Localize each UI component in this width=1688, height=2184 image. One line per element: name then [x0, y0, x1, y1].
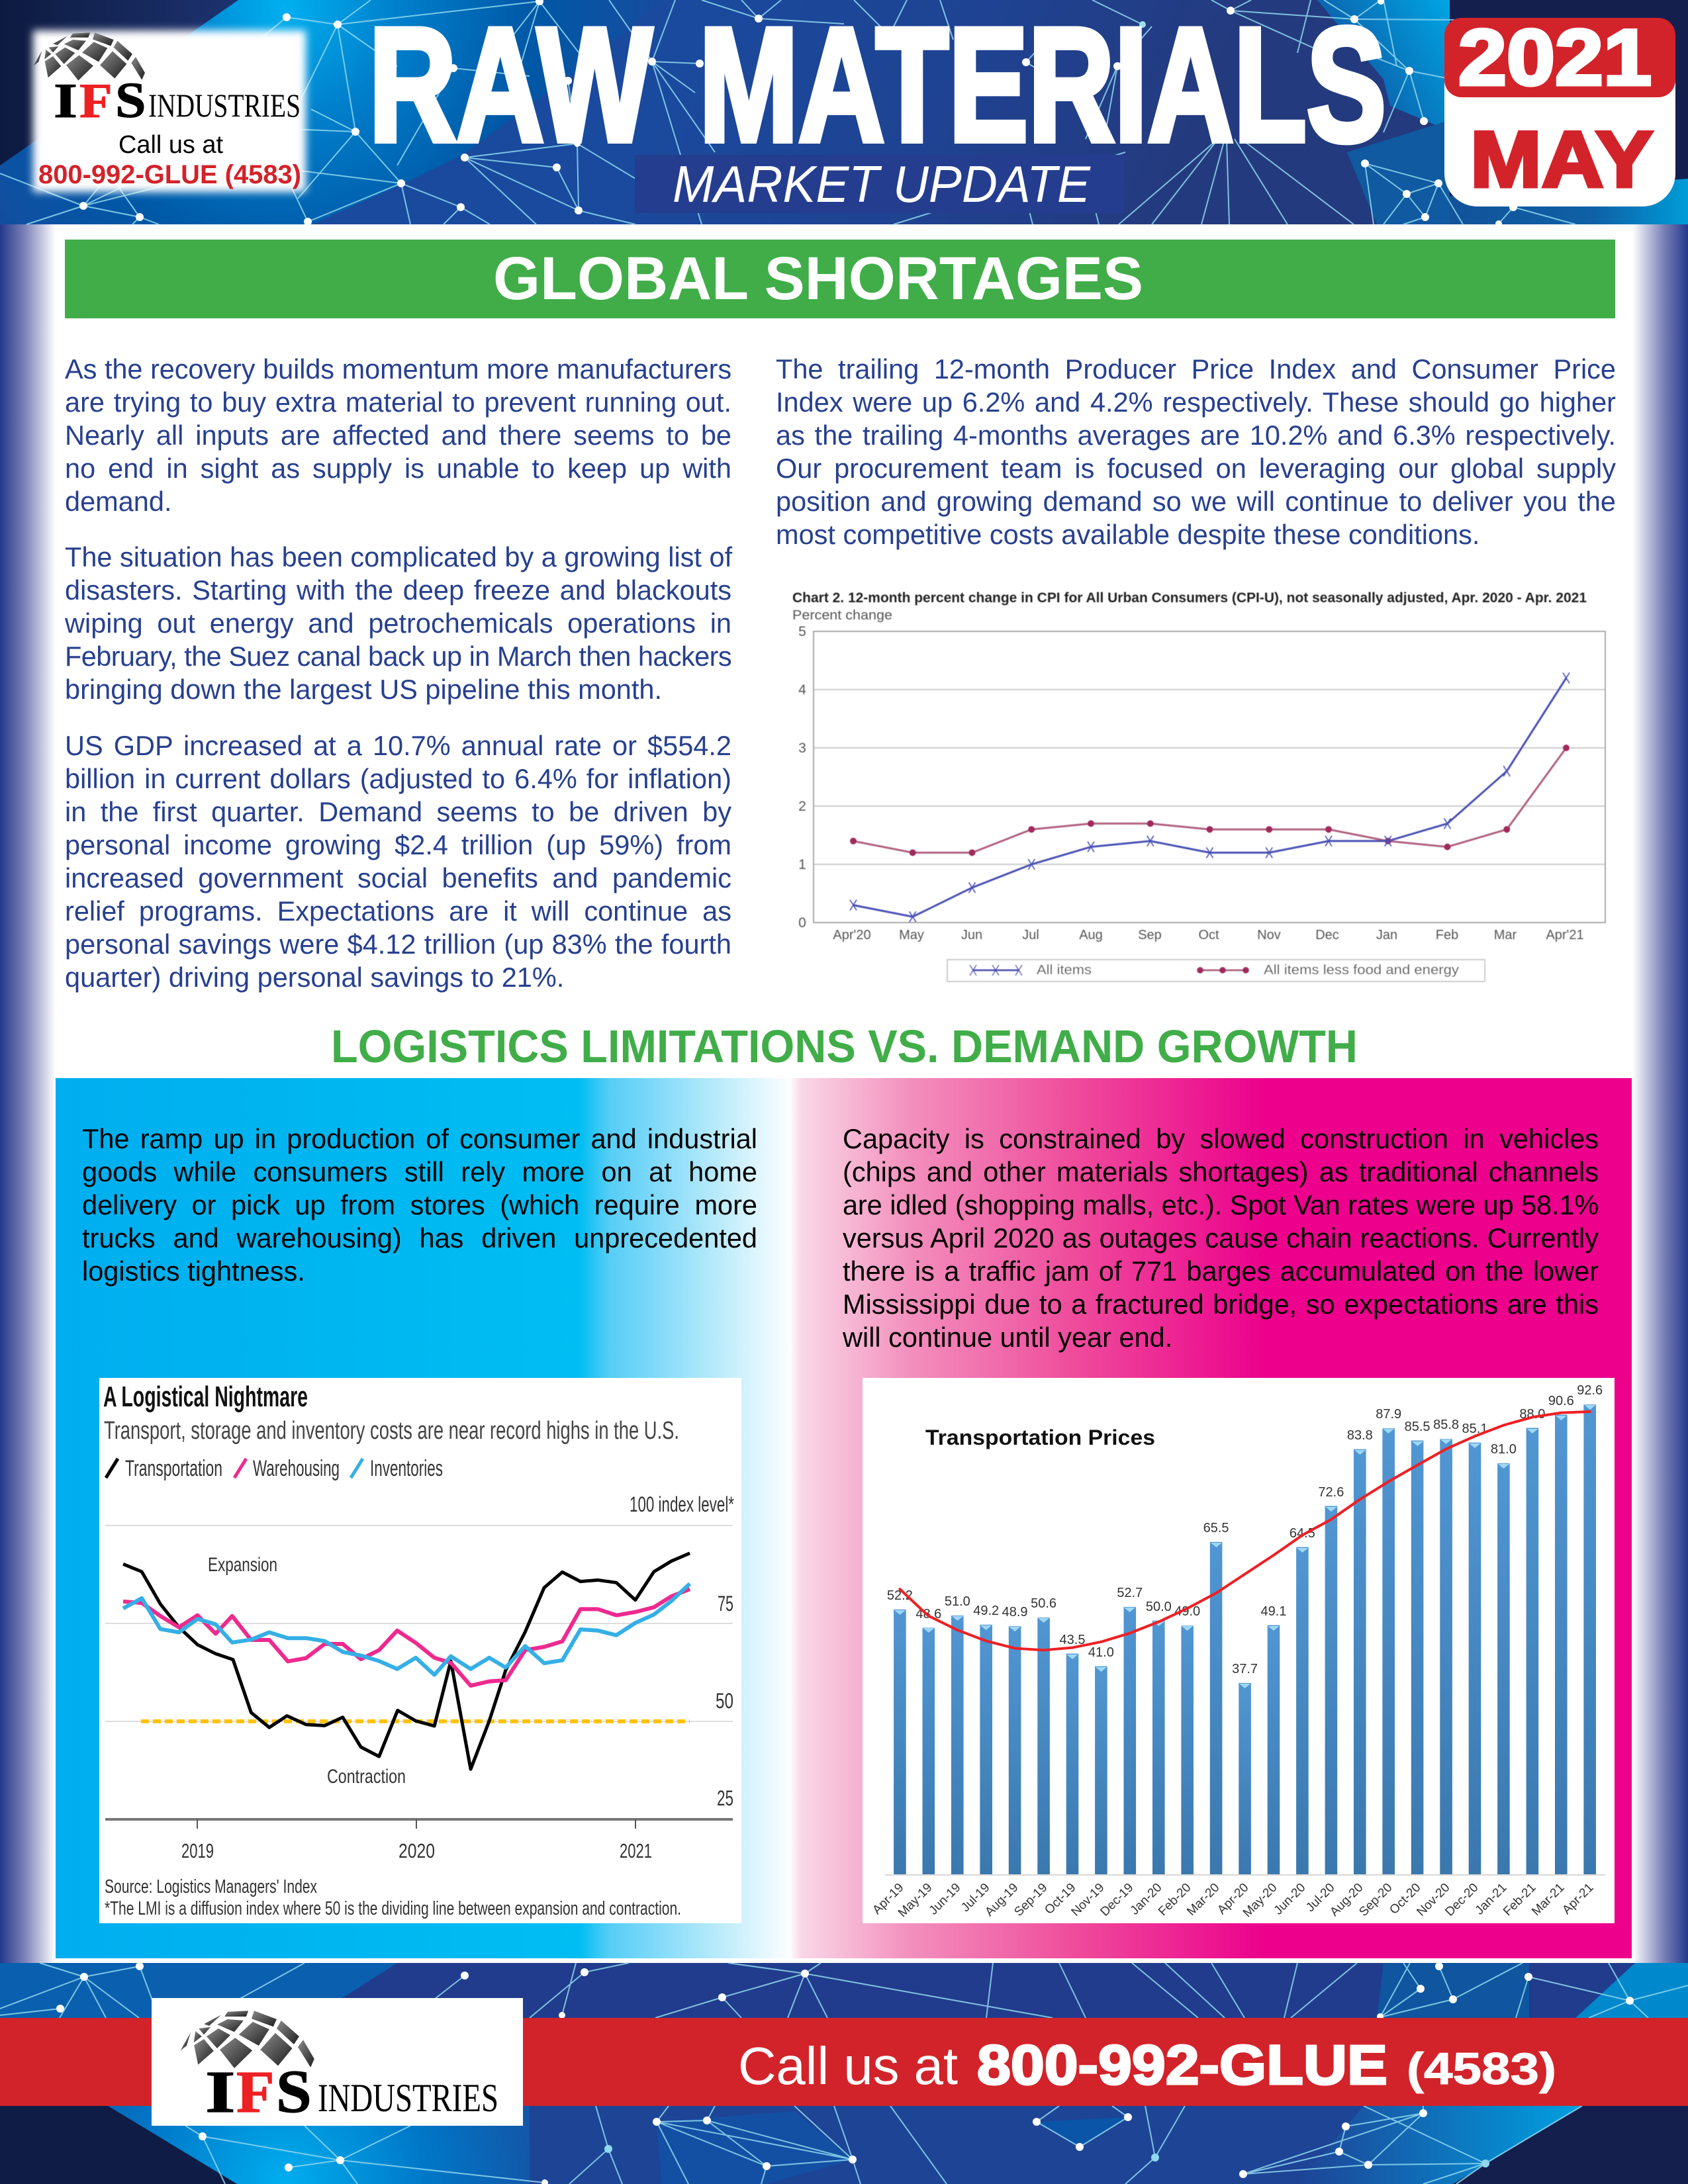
- chart card: a logistical nightmare: Expansion: [208, 1554, 277, 1576]
- text block: recovery paragraph: As the recovery builds momentum more manufacturers: [65, 353, 731, 385]
- text block: price index paragraph: Our procurement team is focused on leveraging our global supply: [776, 453, 1616, 484]
- chart card: a logistical nightmare: 2021: [620, 1839, 652, 1862]
- data labels: 85.1: [1462, 1422, 1487, 1436]
- text block: GDP paragraph: [65, 730, 731, 993]
- data labels: 83.8: [1347, 1428, 1373, 1443]
- text block: recovery paragraph: no end in sight as supply is unable to keep up with: [65, 453, 731, 484]
- line chart: CPI 12-month percent change: Oct: [1198, 928, 1219, 942]
- text block: disasters paragraph: The situation has been complicated by a growing list of: [65, 541, 732, 572]
- footer network background: [0, 1962, 1688, 2184]
- month axis labels: Jan-21: [1473, 1881, 1510, 1918]
- data labels: 48.6: [915, 1607, 941, 1621]
- text block: GDP paragraph: billion in current dollars (adjusted to 6.4% for inflation): [65, 763, 731, 794]
- line chart: CPI 12-month percent change: Chart 2. 12-month percent change in CPI for All Urban Consumers (CPI-U), not seasonally adjusted, Apr. 2020 - Apr. 2021: [792, 590, 1587, 606]
- chart legend: [947, 960, 1485, 981]
- chart card: a logistical nightmare: 75: [718, 1592, 733, 1615]
- month axis labels: Feb-20: [1156, 1881, 1194, 1919]
- text block: price index paragraph: Index were up 6.2% and 4.2% respectively. These should go higher: [776, 387, 1616, 418]
- call us label: Call us at: [118, 131, 223, 159]
- text block: recovery paragraph: Nearly all inputs are affected and there seems to be: [65, 420, 731, 451]
- chart card: a logistical nightmare: *The LMI is a diffusion index where 50 is the dividing line between expansion and contraction.: [105, 1898, 681, 1919]
- chart card: a logistical nightmare: Contraction: [327, 1766, 406, 1788]
- line chart: CPI 12-month percent change: Sep: [1138, 928, 1162, 942]
- heading: global shortages: GLOBAL SHORTAGES: [493, 245, 1143, 312]
- date badge: 2021: [1458, 13, 1652, 102]
- data labels: 50.6: [1031, 1596, 1056, 1611]
- data labels: 65.5: [1203, 1521, 1229, 1535]
- month axis labels: Aug-20: [1327, 1881, 1366, 1919]
- month axis labels: Jul-20: [1303, 1881, 1338, 1915]
- month axis labels: Mar-20: [1184, 1881, 1223, 1919]
- text block: GDP paragraph: personal income growing $2.4 trillion (up 59%) from: [65, 829, 731, 860]
- month axis labels: Jun-20: [1272, 1881, 1309, 1918]
- text block: capacity constraints: versus April 2020 as outages cause chain reactions. Currently: [843, 1222, 1599, 1253]
- chart card: a logistical nightmare: Source: Logistics Managers' Index: [105, 1876, 317, 1897]
- data labels: 41.0: [1088, 1645, 1114, 1660]
- phone number: 800-992-GLUE (4583): [38, 160, 301, 189]
- text block: logistics tightness: trucks and warehousing) has driven unprecedented: [82, 1222, 757, 1253]
- title: [369, 0, 1386, 175]
- text block: price index paragraph: most competitive costs available despite these conditions.: [776, 519, 1479, 550]
- text block: logistics tightness: delivery or pick up from stores (which require more: [82, 1189, 757, 1220]
- text block: price index paragraph: [776, 353, 1616, 550]
- footer red call band: [0, 2018, 1688, 2106]
- chart card: a logistical nightmare: 25: [717, 1786, 733, 1810]
- chart card: transportation prices: Transportation Prices: [925, 1426, 1155, 1449]
- month axis labels: Aug-19: [982, 1881, 1021, 1919]
- text block: disasters paragraph: wiping out energy and petrochemicals operations in: [65, 608, 731, 639]
- data labels: 37.7: [1232, 1662, 1258, 1676]
- panel: logistics cyan: [56, 1078, 793, 1958]
- line chart: CPI 12-month percent change: [792, 590, 1605, 981]
- text block: logistics tightness: logistics tightness.: [82, 1255, 305, 1287]
- data labels: 85.8: [1433, 1418, 1459, 1432]
- logo wordmark: I: [54, 74, 77, 128]
- text block: recovery paragraph: are trying to buy extra material to prevent running out.: [65, 387, 731, 418]
- icon: logo dome: [34, 32, 145, 81]
- header network background: [0, 0, 1688, 227]
- line chart: CPI 12-month percent change: 5: [798, 624, 806, 639]
- side gradient bar left: [0, 224, 56, 1964]
- data labels: 88.0: [1519, 1407, 1545, 1422]
- month axis labels: Dec-20: [1442, 1881, 1481, 1919]
- line chart: CPI 12-month percent change: Jul: [1022, 928, 1039, 942]
- logo wordmark: INDUSTRIES: [148, 87, 301, 124]
- month axis labels: Sep-20: [1356, 1881, 1395, 1919]
- text block: price index paragraph: as the trailing 4-months averages are 10.2% and 6.3% respectively.: [776, 420, 1616, 451]
- month axis labels: May-20: [1241, 1881, 1280, 1920]
- chart card: a logistical nightmare: 2020: [399, 1839, 435, 1862]
- logo wordmark: INDUSTRIES: [318, 2076, 498, 2120]
- line chart: CPI 12-month percent change: 1: [798, 857, 806, 872]
- data labels: 72.6: [1318, 1485, 1344, 1500]
- trend line: [900, 1412, 1590, 1650]
- text block: GDP paragraph: increased government social benefits and pandemic: [65, 862, 731, 893]
- logo wordmark: S: [115, 73, 146, 128]
- chart card: a logistical nightmare: A Logistical Nightmare: [103, 1381, 308, 1413]
- line chart: CPI 12-month percent change: Percent change: [792, 608, 892, 623]
- bars: [894, 1404, 1596, 1874]
- line chart: CPI 12-month percent change: 4: [798, 682, 806, 698]
- data labels: 64.5: [1289, 1526, 1315, 1541]
- footer call to action: (4583): [1407, 2044, 1556, 2094]
- heading: global shortages: [65, 240, 1615, 318]
- text block: disasters paragraph: disasters. Starting with the deep freeze and blackouts: [65, 574, 731, 606]
- month axis labels: Sep-19: [1011, 1881, 1051, 1919]
- line chart: CPI 12-month percent change: May: [899, 928, 924, 942]
- month axis labels: Jun-19: [927, 1881, 964, 1918]
- line chart: CPI 12-month percent change: Aug: [1079, 928, 1103, 942]
- data labels: 50.0: [1146, 1600, 1172, 1614]
- text block: logistics tightness: The ramp up in production of consumer and industrial: [82, 1123, 757, 1154]
- chart card: a logistical nightmare: 100 index level*: [630, 1492, 734, 1516]
- month axis labels: Nov-20: [1414, 1881, 1453, 1919]
- side gradient bar right: [1632, 224, 1688, 1964]
- text block: GDP paragraph: personal savings were $4.12 trillion (up 83% the fourth: [65, 929, 731, 960]
- text block: capacity constraints: Mississippi due to a fractured bridge, so expectations are this: [843, 1289, 1599, 1320]
- data labels: 49.1: [1261, 1604, 1286, 1619]
- data labels: 85.5: [1405, 1420, 1430, 1434]
- footer call to action: Call us at: [738, 2036, 958, 2095]
- text block: capacity constraints: Capacity is constrained by slowed construction in vehicles: [843, 1123, 1599, 1154]
- logo wordmark: F: [236, 2059, 275, 2125]
- line chart: CPI 12-month percent change: 3: [798, 741, 806, 756]
- text block: capacity constraints: (chips and other materials shortages) as traditional channels: [843, 1156, 1599, 1187]
- month axis labels: Apr-20: [1215, 1881, 1252, 1917]
- text block: capacity constraints: [843, 1123, 1599, 1353]
- line chart: CPI 12-month percent change: 0: [798, 915, 806, 931]
- month axis labels: Jan-20: [1128, 1881, 1165, 1918]
- text block: disasters paragraph: bringing down the largest US pipeline this month.: [65, 674, 662, 705]
- line chart: CPI 12-month percent change: 2: [798, 799, 806, 814]
- logo wordmark: [205, 2058, 498, 2125]
- logo wordmark: F: [79, 73, 113, 128]
- footer logo card: [152, 1998, 523, 2126]
- logo wordmark: [54, 73, 301, 128]
- line chart: CPI 12-month percent change: Apr'20: [833, 928, 871, 942]
- line chart: CPI 12-month percent change: Apr'21: [1546, 928, 1584, 942]
- chart legend: Inventories: [370, 1456, 443, 1481]
- subtitle box: market update: MARKET UPDATE: [673, 155, 1091, 213]
- date badge: MAY: [1470, 115, 1653, 204]
- line chart: CPI 12-month percent change: Mar: [1494, 928, 1517, 942]
- month axis labels: May-19: [896, 1881, 935, 1920]
- data labels: 90.6: [1548, 1394, 1574, 1408]
- panel: capacity magenta: [792, 1078, 1632, 1958]
- text block: recovery paragraph: [65, 353, 731, 517]
- data labels: 48.9: [1002, 1605, 1028, 1619]
- line chart: CPI 12-month percent change: Dec: [1315, 928, 1339, 942]
- line chart: CPI 12-month percent change: Jun: [961, 928, 982, 942]
- month axis labels: Mar-21: [1529, 1881, 1568, 1919]
- icon: logo dome: [181, 2011, 314, 2068]
- text block: price index paragraph: The trailing 12-month Producer Price Index and Consumer Price: [776, 353, 1616, 385]
- line chart: CPI 12-month percent change: Jan: [1376, 928, 1397, 942]
- data labels: 43.5: [1060, 1633, 1085, 1647]
- heading: logistics limitations: LOGISTICS LIMITATIONS VS. DEMAND GROWTH: [331, 1021, 1358, 1072]
- text block: price index paragraph: position and growing demand so we will continue to deliver you the: [776, 486, 1616, 517]
- month axis labels: Oct-20: [1387, 1881, 1424, 1917]
- chart legend: All items less food and energy: [1264, 963, 1459, 978]
- text block: capacity constraints: will continue until year end.: [843, 1322, 1172, 1353]
- data labels: 92.6: [1577, 1383, 1603, 1398]
- data labels: 51.0: [945, 1594, 970, 1609]
- month axis labels: Dec-19: [1098, 1881, 1137, 1919]
- date badge: [1444, 13, 1675, 206]
- data labels: [887, 1383, 1603, 1676]
- text block: logistics tightness: [82, 1123, 757, 1287]
- chart card: a logistical nightmare: 50: [716, 1689, 733, 1713]
- chart card: a logistical nightmare: [99, 1378, 741, 1923]
- chart card: a logistical nightmare: 2019: [181, 1839, 214, 1862]
- month axis labels: Apr-21: [1560, 1881, 1597, 1917]
- text block: GDP paragraph: relief programs. Expectations are it will continue as: [65, 895, 731, 927]
- chart card: transportation prices: [863, 1378, 1615, 1923]
- chart legend: Transportation: [125, 1456, 222, 1481]
- text block: disasters paragraph: [65, 541, 732, 705]
- text block: capacity constraints: there is a traffic jam of 771 barges accumulated on the lower: [843, 1255, 1599, 1287]
- data labels: 81.0: [1491, 1442, 1517, 1457]
- header logo card: [33, 30, 306, 192]
- month axis labels: Oct-19: [1042, 1881, 1079, 1917]
- data labels: 52.7: [1117, 1586, 1143, 1600]
- logo wordmark: I: [205, 2059, 236, 2125]
- chart legend: All items: [1037, 963, 1092, 978]
- line chart: CPI 12-month percent change: Nov: [1257, 928, 1281, 942]
- chart card: a logistical nightmare: Transport, storage and inventory costs are near record highs in the U.S.: [104, 1417, 679, 1445]
- data labels: 87.9: [1376, 1407, 1401, 1422]
- text block: capacity constraints: are idled (shopping malls, etc.). Spot Van rates were up 58.1%: [843, 1189, 1599, 1220]
- chart legend: [106, 1456, 443, 1481]
- data labels: 49.0: [1174, 1604, 1200, 1619]
- text block: logistics tightness: goods while consumers still rely more on at home: [82, 1156, 757, 1187]
- line chart: CPI 12-month percent change: Feb: [1436, 928, 1458, 942]
- data labels: 52.2: [887, 1588, 913, 1603]
- month axis labels: [870, 1881, 1597, 1920]
- text block: recovery paragraph: demand.: [65, 486, 172, 517]
- month axis labels: Feb-21: [1501, 1881, 1539, 1919]
- month axis labels: Nov-19: [1068, 1881, 1107, 1919]
- footer call to action: 800-992-GLUE: [977, 2034, 1387, 2096]
- logo wordmark: S: [276, 2058, 312, 2125]
- footer call to action: [738, 2034, 1556, 2096]
- month axis labels: Apr-19: [870, 1881, 907, 1917]
- data labels: 49.2: [973, 1604, 999, 1618]
- text block: GDP paragraph: US GDP increased at a 10.7% annual rate or $554.2: [65, 730, 731, 761]
- month axis labels: Jul-19: [959, 1881, 993, 1915]
- text block: GDP paragraph: in the first quarter. Demand seems to be driven by: [65, 796, 731, 827]
- text block: GDP paragraph: quarter) driving personal savings to 21%.: [65, 962, 564, 993]
- text block: disasters paragraph: February, the Suez canal back up in March then hackers: [65, 641, 731, 672]
- chart legend: Warehousing: [253, 1456, 340, 1481]
